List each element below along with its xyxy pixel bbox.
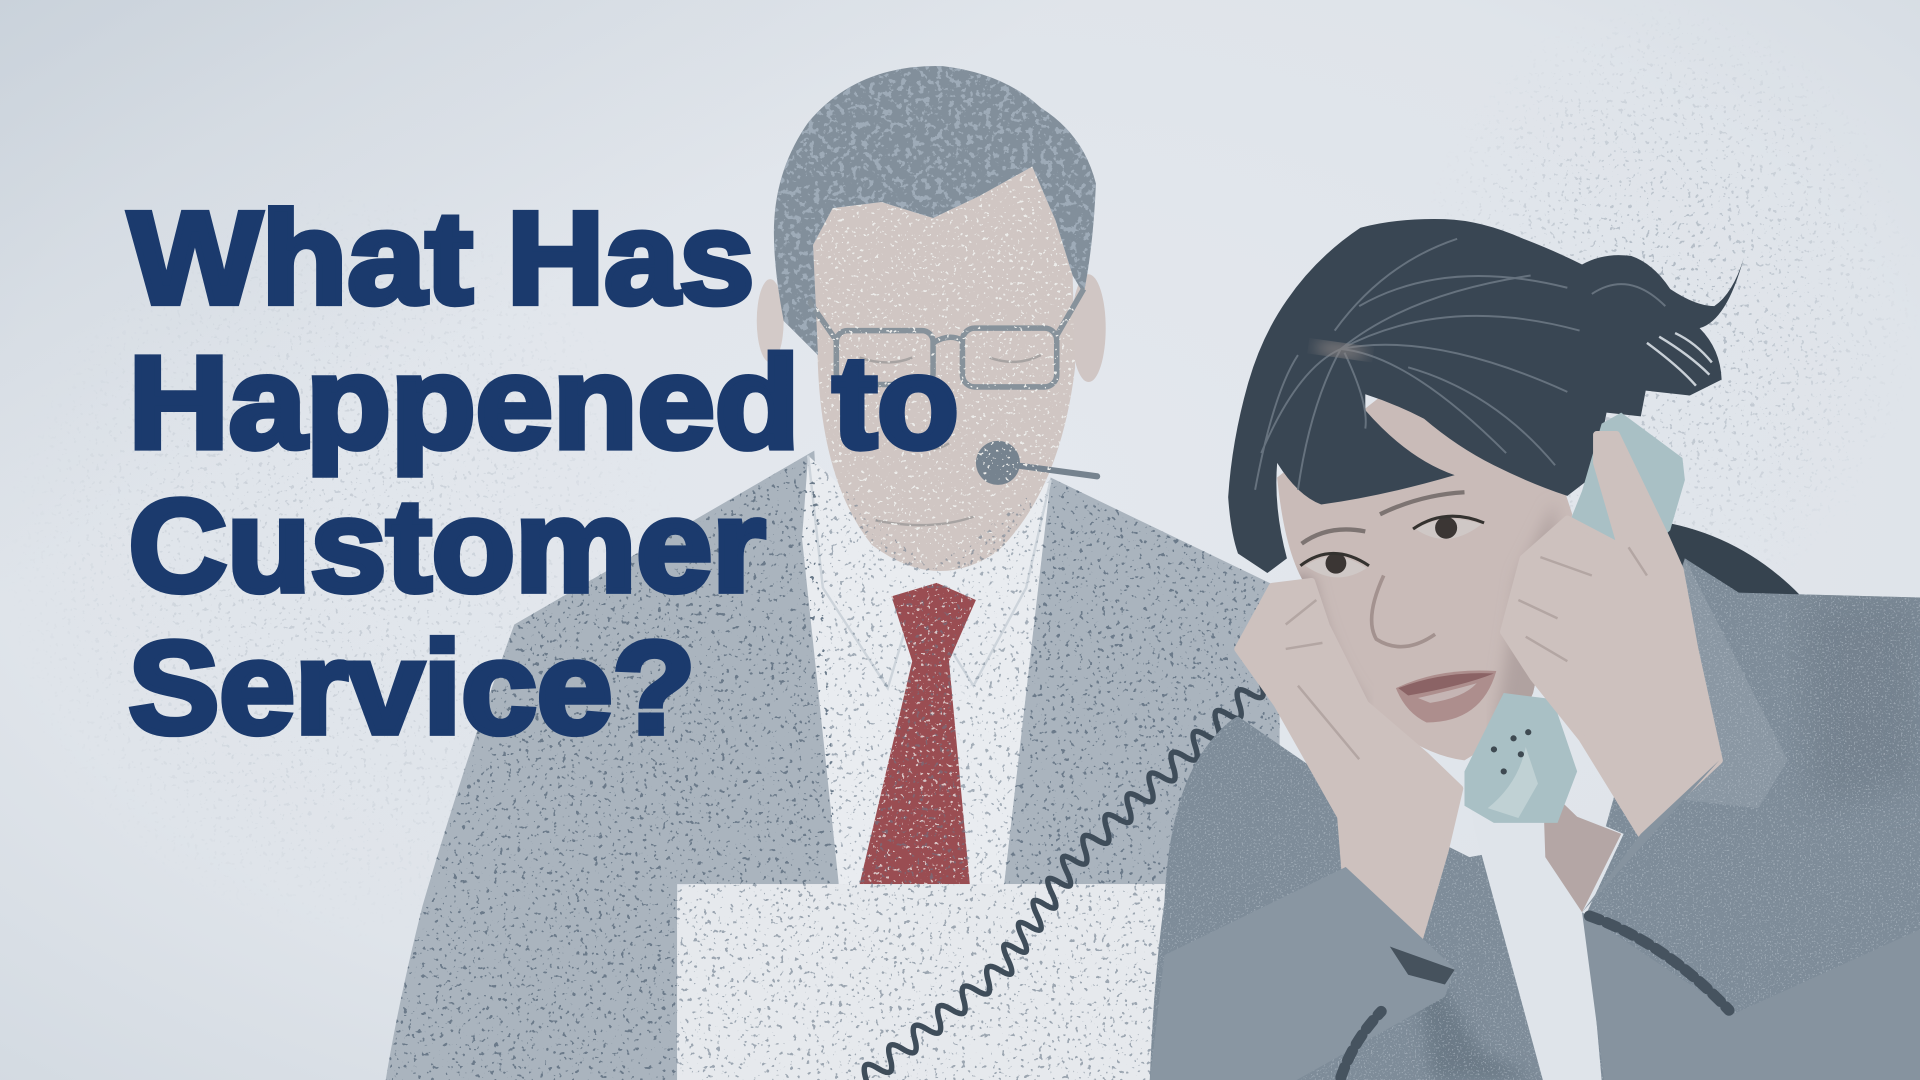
figure: man with headset xyxy=(386,66,1280,1080)
man shirt xyxy=(802,456,1051,884)
woman right hand xyxy=(1504,435,1719,834)
man left ear xyxy=(757,279,784,362)
title xyxy=(129,184,959,761)
phone cord xyxy=(853,683,1263,1080)
left hand finger creases xyxy=(1286,600,1359,759)
phone mouthpiece xyxy=(1464,693,1577,823)
woman nose xyxy=(1372,576,1435,647)
phone earpiece xyxy=(1518,413,1685,686)
parting highlight xyxy=(1313,340,1368,360)
jacket shading xyxy=(1150,558,1920,1080)
title: to xyxy=(833,329,959,476)
laptop xyxy=(677,884,1176,1080)
woman neck xyxy=(1543,784,1621,912)
ponytail loops xyxy=(1647,333,1712,386)
left sleeve xyxy=(1150,867,1455,1080)
title: Happened xyxy=(129,329,800,476)
man hair xyxy=(774,66,1096,355)
face shading xyxy=(1298,514,1558,711)
hair strands xyxy=(1255,239,1665,490)
woman face xyxy=(1277,384,1572,760)
title: Customer xyxy=(129,472,765,619)
title: What xyxy=(129,184,473,331)
cuff xyxy=(1390,947,1455,984)
title: Service? xyxy=(129,614,696,761)
woman mouth xyxy=(1396,670,1496,722)
man face xyxy=(813,167,1075,571)
figure: stressed woman on phone xyxy=(1150,219,1920,1080)
speckle overlay on man xyxy=(367,61,1298,1080)
right sleeve xyxy=(1582,760,1920,1080)
man suit xyxy=(386,451,1280,1080)
man collar xyxy=(808,456,1051,688)
title: Has xyxy=(507,184,754,331)
woman left hand xyxy=(1238,582,1460,951)
woman shirt xyxy=(1464,767,1624,1080)
ponytail behind neck xyxy=(1653,520,1800,600)
woman eyes xyxy=(1300,492,1484,577)
woman jacket xyxy=(1150,558,1920,1080)
man right ear xyxy=(1071,274,1106,382)
sleeve buttons xyxy=(1341,916,1729,1078)
man eyes and mouth xyxy=(860,355,1041,525)
man tie xyxy=(860,583,976,884)
headset mic xyxy=(976,441,1097,485)
man glasses xyxy=(808,289,1084,387)
right hand finger creases xyxy=(1518,547,1647,661)
woman hair xyxy=(1228,219,1744,573)
